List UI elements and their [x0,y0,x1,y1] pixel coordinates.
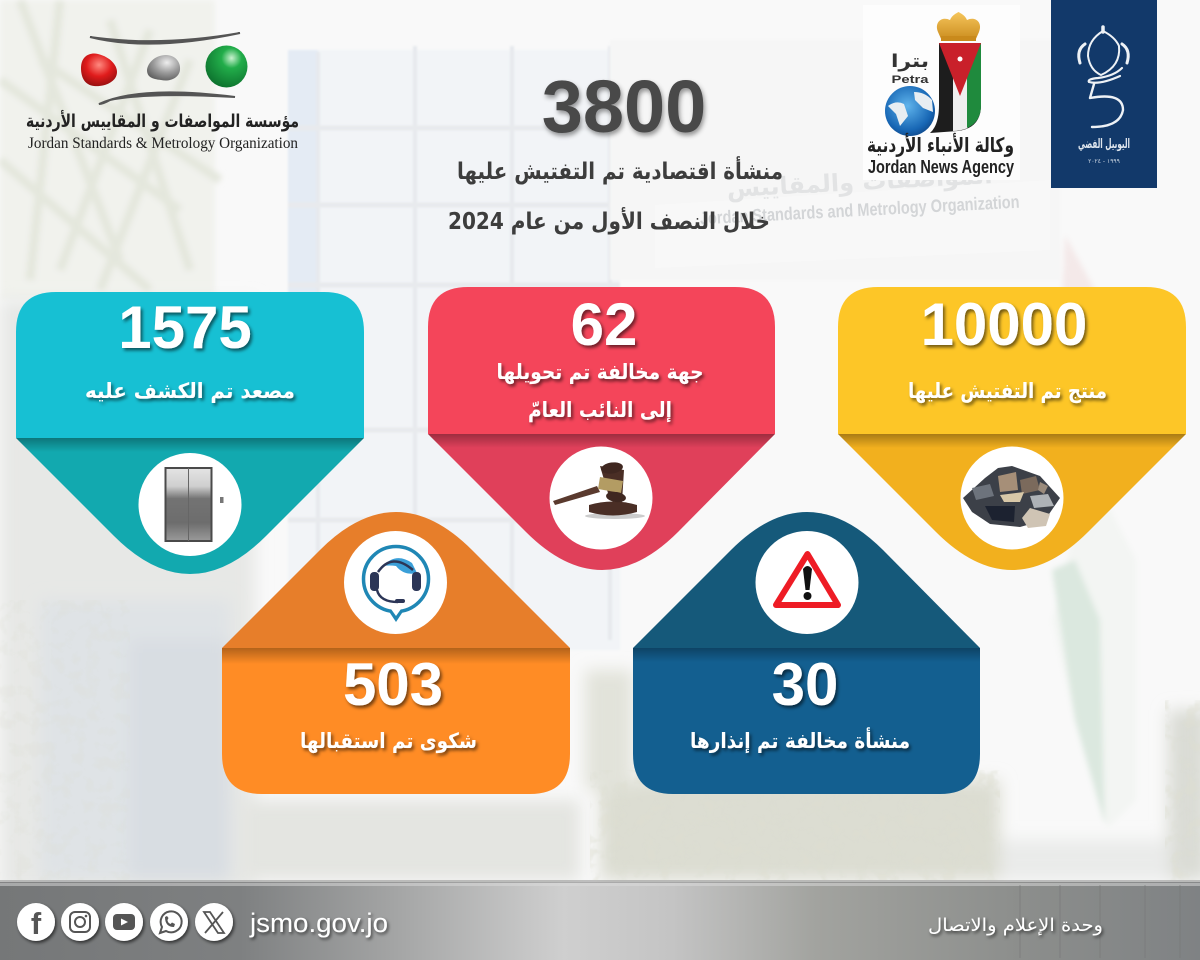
jubilee years: ١٩٩٩ - ٢٠٢٤ [1088,158,1120,165]
background lower building [40,600,580,880]
icon: pile of goods [960,446,1064,550]
footer building texture [1020,885,1180,958]
label line 1: جهة مخالفة تم تحويلها [496,360,704,384]
number: 1575 [118,294,252,361]
logo balls [81,46,248,88]
background building facade [288,40,1060,650]
icon: gavel [550,446,652,550]
logo english name: Jordan Standards & Metrology Organization [28,135,298,152]
label: مصعد تم الكشف عليه [85,379,295,403]
number: 30 [772,651,838,718]
background foliage texture [0,600,1200,880]
subtitle line 1: منشأة اقتصادية تم التفتيش عليها [457,155,783,185]
background sign board: المواصفات والمقاييس [726,161,993,203]
petra wordmark latin: Petra [892,74,930,86]
footer unit name: وحدة الإعلام والاتصال [928,915,1103,936]
icon: elevator [138,453,242,556]
logo swooshes [90,33,240,104]
background palm tree [0,0,220,300]
icon: facebook: f [31,906,42,941]
background sign board: Jordan Standards and Metrology Organization [699,192,1020,228]
website url: jsmo.gov.jo [249,908,388,938]
icon: X [195,903,233,941]
logo: Petra news agency [863,5,1020,180]
logo: JSMO [26,33,299,152]
label: منتج تم التفتيش عليها [908,379,1107,403]
panel: elevators [16,292,364,574]
panel: warned establishments [633,512,980,794]
number: 62 [571,291,637,358]
icon: facebook [17,903,55,941]
icon: globe [885,86,935,136]
background flag [1052,235,1136,828]
icon: whatsapp [150,903,188,941]
label: شكوى تم استقبالها [300,729,477,753]
icon: youtube [105,903,143,941]
logo arabic name: مؤسسة المواصفات و المقاييس الأردنية [26,110,299,132]
panel: referred violators [428,287,775,570]
icon: flag shield [930,43,981,133]
title: 3800: 3800 [542,65,706,148]
subtitle line 2: خلال النصف الأول من عام 2024 [448,206,770,235]
background trees [585,670,1200,880]
panel: complaints [222,512,570,794]
footer band [0,880,1200,960]
icon: headset support [344,531,447,634]
social icons [17,903,233,941]
logo: silver jubilee 25 [1051,0,1157,188]
agency english name: Jordan News Agency [868,157,1014,177]
jubilee numeral 25 [1079,27,1128,127]
jubilee arabic title: اليوبيل الفضي [1078,137,1130,152]
background sign board [655,161,1050,268]
background left lower [0,300,255,890]
icon: instagram [61,903,99,941]
panel: inspected products [838,287,1186,570]
label: منشأة مخالفة تم إنذارها [690,726,910,753]
number: 503 [343,651,443,718]
icon: crown [937,12,980,41]
icon: warning [756,531,858,634]
label line 2: إلى النائب العامّ [528,398,672,422]
number: 10000 [921,291,1087,358]
petra wordmark arabic: بترا [891,51,929,72]
agency arabic name: وكالة الأنباء الأردنية [867,132,1014,157]
